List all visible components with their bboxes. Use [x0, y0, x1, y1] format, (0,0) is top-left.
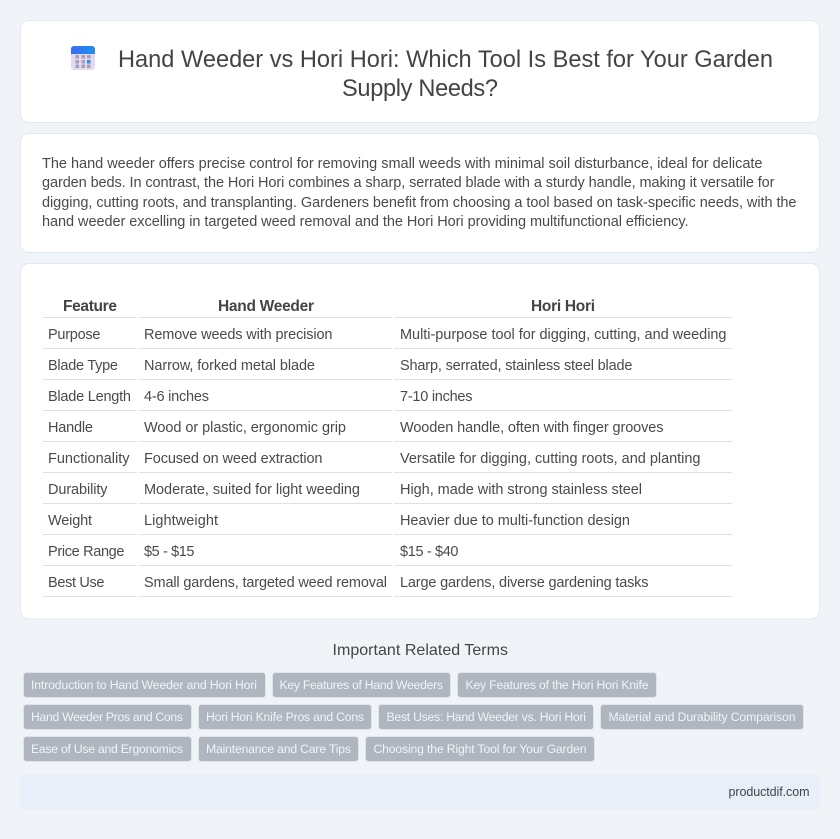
tag	[24, 704, 192, 730]
table header row: Hand Weeder	[218, 298, 314, 315]
table header row	[43, 298, 732, 318]
table row: Handle: Wood or plastic, ergonomic grip	[144, 420, 346, 436]
table row: Durability: High, made with strong stainless steel	[400, 482, 642, 498]
tag	[458, 672, 656, 698]
table row: Purpose: Purpose	[48, 327, 100, 343]
table row: Handle: Handle	[48, 420, 93, 436]
tag: Material and Durability Comparison	[608, 710, 796, 724]
table row: Handle: Wooden handle, often with finger grooves	[400, 420, 664, 436]
table row: Blade Type: Narrow, forked metal blade	[144, 358, 315, 374]
table row: Price Range: $5 - $15	[144, 544, 194, 560]
panel: related term tags	[24, 672, 804, 762]
tag: Ease of Use and Ergonomics	[31, 742, 183, 756]
footer bar	[20, 775, 820, 809]
tag: Maintenance and Care Tips	[206, 742, 351, 756]
table row: Blade Length: 4-6 inches	[144, 389, 209, 405]
table row: Blade Type: Sharp, serrated, stainless steel blade	[400, 358, 632, 374]
table row: Blade Length	[43, 389, 732, 411]
title: Supply Needs?	[342, 76, 498, 102]
table row: Price Range	[43, 544, 732, 566]
table row: Blade Type	[43, 358, 732, 380]
table row: Functionality	[43, 451, 732, 473]
heading: important related terms: Important Related Terms	[332, 642, 508, 659]
footer text: productdif.com	[728, 785, 810, 799]
table row: Durability: Durability	[48, 482, 108, 498]
table row: Price Range: $15 - $40	[400, 544, 458, 560]
table row: Weight	[43, 513, 732, 535]
table row: Weight: Weight	[48, 513, 92, 529]
tag	[198, 736, 358, 762]
tag: Key Features of Hand Weeders	[280, 678, 443, 692]
tag	[24, 736, 192, 762]
panel: title header	[20, 20, 820, 122]
text block: introduction: garden beds. In contrast, the Hori Hori combines a sharp, serrated blade with a sturdy handle, making it versatile for	[42, 175, 775, 191]
table header row: Hori Hori	[531, 298, 595, 315]
text block: introduction: The hand weeder offers precise control for removing small weeds with minimal soil disturbance, ideal for delicate	[42, 156, 762, 172]
table row: Purpose: Remove weeds with precision	[144, 327, 332, 343]
table row: Durability	[43, 482, 732, 504]
table row: Best Use	[43, 575, 732, 597]
tag: Choosing the Right Tool for Your Garden	[374, 742, 586, 756]
table row: Best Use: Best Use	[48, 575, 104, 591]
table row: Best Use: Small gardens, targeted weed removal	[144, 575, 387, 591]
tag: Best Uses: Hand Weeder vs. Hori Hori	[386, 710, 586, 724]
text block: introduction: digging, cutting roots, and transplanting. Gardeners benefit from choosing a tool based on task-specific needs, with the	[42, 195, 796, 211]
table row: Durability: Moderate, suited for light weeding	[144, 482, 360, 498]
tag	[366, 736, 594, 762]
tag: Introduction to Hand Weeder and Hori Hori	[31, 678, 257, 692]
tag	[378, 704, 594, 730]
table row: Best Use: Large gardens, diverse gardening tasks	[400, 575, 648, 591]
table header row: Feature	[63, 298, 117, 315]
table row: Functionality: Focused on weed extraction	[144, 451, 322, 467]
text block: introduction: hand weeder excelling in targeted weed removal and the Hori Hori providing multifunctional efficiency.	[42, 214, 688, 230]
table row: Blade Length: Blade Length	[48, 389, 131, 405]
tag	[24, 672, 266, 698]
title: Hand Weeder vs Hori Hori: Which Tool Is Best for Your Garden	[118, 47, 773, 73]
tag	[198, 704, 372, 730]
table row: Price Range: Price Range	[48, 544, 124, 560]
table row: Weight: Lightweight	[144, 513, 218, 529]
table row: Blade Length: 7-10 inches	[400, 389, 472, 405]
table row: Blade Type: Blade Type	[48, 358, 118, 374]
panel: introduction paragraph	[20, 134, 820, 252]
tag	[272, 672, 450, 698]
tag: Key Features of the Hori Hori Knife	[466, 678, 649, 692]
tag	[600, 704, 804, 730]
table row: Functionality: Versatile for digging, cutting roots, and planting	[400, 451, 700, 467]
tag: Hori Hori Knife Pros and Cons	[206, 710, 364, 724]
panel: comparison table	[20, 264, 820, 619]
icon: calendar	[71, 46, 95, 70]
table row: Functionality: Functionality	[48, 451, 130, 467]
table row: Purpose: Multi-purpose tool for digging, cutting, and weeding	[400, 327, 726, 343]
table row: Handle	[43, 420, 732, 442]
tag: Hand Weeder Pros and Cons	[31, 710, 183, 724]
table row: Weight: Heavier due to multi-function design	[400, 513, 630, 529]
table row: Purpose	[43, 327, 732, 349]
